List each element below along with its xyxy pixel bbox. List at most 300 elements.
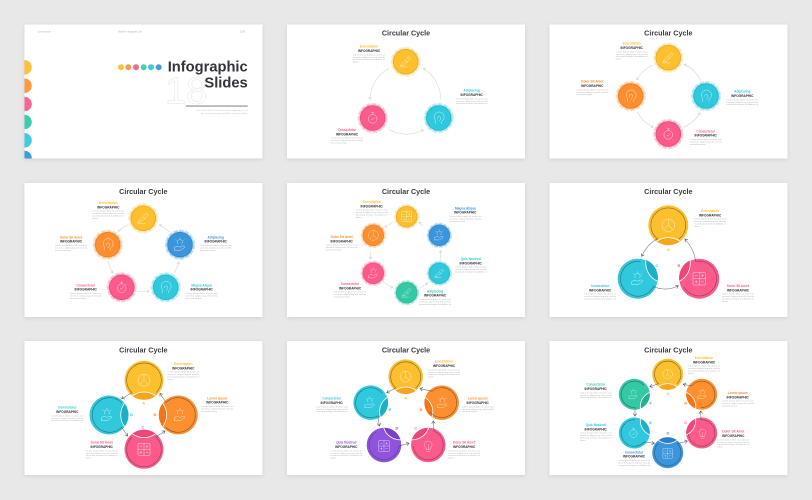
label: Adipiscing [419, 289, 452, 306]
label: Quis Nostrud: eiusmod tempor incididunt ut [455, 270, 487, 274]
label: Consectetur: Consectetur [591, 284, 610, 288]
label: Quis Nostrud [455, 257, 488, 274]
label: Consectetur: Consectetur [341, 282, 360, 286]
label: Exercitation: sectetur adipiscing elit sed do [428, 371, 461, 374]
label: Exercitation [92, 201, 125, 220]
letters: B [678, 263, 681, 268]
letters: A [667, 391, 670, 396]
label: Dolor Sit Amet: Dolor Sit Amet [581, 80, 604, 84]
label: Exercitation: labore [428, 376, 435, 379]
label: Lorem Ipsum: Lorem ipsum dolor sit amet con [462, 405, 495, 408]
arrow: yellow to green [650, 361, 681, 387]
arrow: to pink [637, 112, 653, 127]
label: Dolor Sit Amet: eiusmod tempor incididunt ut [86, 454, 118, 457]
label: Dolor Sit Amet: Lorem ipsum dolor sit amet con [326, 244, 359, 247]
label: Exercitation: labore [616, 58, 622, 61]
label: Exercitation: INFOGRAPHIC [361, 204, 384, 208]
label: Consectetur green: Lorem ipsum dolor sit amet con [580, 391, 613, 394]
label: Exercitation: labore [167, 378, 174, 381]
panel: five gears cycle [24, 183, 262, 317]
label: Dolor Sit Amet: sectetur adipiscing elit sed do [722, 295, 755, 298]
label: Consectetur: INFOGRAPHIC [321, 401, 344, 405]
label: Exercitation: INFOGRAPHIC [172, 366, 195, 370]
label: Adipiscing: sectetur adipiscing elit sed do [456, 100, 489, 103]
circle: green F [619, 379, 650, 410]
label: Dolor Sit Amet: Lorem ipsum dolor sit amet con [576, 88, 609, 91]
letters: D [667, 431, 670, 436]
arrow: left arc [370, 68, 389, 99]
label: Consectetur: eiusmod tempor incididunt ut [51, 419, 84, 422]
label: Lorem Ipsum [201, 396, 234, 413]
label: Exercitation: eiusmod tempor incididunt ut [688, 370, 720, 372]
heading: Circular Cycle [382, 29, 430, 38]
label: Lorem Ipsum: eiusmod tempor [462, 410, 478, 413]
label: Exercitation [167, 362, 200, 381]
label: Dolor Sit Amet [326, 235, 359, 252]
label: Adipiscing: Lorem ipsum dolor sit amet con [200, 244, 233, 247]
icon: pink gear [359, 104, 387, 132]
letters: B [684, 401, 687, 406]
icon: cyan gear [425, 104, 453, 132]
letters: C [656, 263, 659, 268]
label: Consectetur: eiusmod tempor incididunt ut [316, 410, 348, 413]
label: Dolor Sit Amet [448, 441, 481, 460]
panel: three gears cycle [287, 24, 525, 158]
cover title: Infographic [168, 60, 248, 76]
label: Lorem Ipsum: Lorem ipsum dolor sit amet con [722, 400, 755, 403]
header small text: Lorem ipsum [38, 31, 51, 34]
icon: pink gear [362, 262, 385, 285]
heading: Circular Cycle [644, 187, 692, 196]
label: Adipiscing [726, 90, 759, 106]
label: Dolor Sit Amet: Lorem ipsum dolor sit amet con [86, 449, 119, 452]
label: Lorem Ipsum: INFOGRAPHIC [727, 395, 750, 399]
label: Dolor Sit Amet: eiusmod tempor [55, 249, 71, 252]
arrow: yellow to cyan [122, 363, 161, 399]
label: Consectetur blue: Lorem ipsum dolor sit amet con [618, 459, 651, 462]
arrow: to cyan [420, 283, 428, 288]
label: Consectetur [334, 282, 367, 298]
label: Lorem Ipsum [462, 397, 495, 413]
label: Consectetur [584, 284, 617, 300]
label: Exercitation: labore [694, 225, 701, 228]
label: Exercitation: Exercitation [363, 200, 381, 204]
arrow: to pink [108, 261, 113, 273]
label: Dolor Sit Amet [86, 441, 119, 460]
label: Adipiscing: sectetur adipiscing elit sed do [419, 300, 452, 303]
circle: yellow A [648, 205, 688, 245]
label: Exercitation: eiusmod tempor incididunt ut [616, 55, 648, 58]
label: Exercitation: INFOGRAPHIC [621, 46, 644, 50]
arrow: to blue [440, 251, 442, 260]
label: Quis Nostrud: labore [580, 439, 586, 442]
label: Exercitation: Lorem ipsum dolor sit amet con [167, 371, 200, 374]
label: Dolor Sit Amet: labore [86, 457, 92, 460]
circle: orange B [159, 396, 198, 434]
label: Exercitation: INFOGRAPHIC [358, 49, 381, 53]
arrow: pink to orange [688, 411, 715, 446]
label: Consectetur: eiusmod tempor incididunt ut [584, 298, 616, 300]
label: Quis Nostrud: INFOGRAPHIC [335, 445, 358, 449]
label: Dolor Sit Amet: Lorem ipsum dolor sit amet con [448, 449, 481, 452]
label: Consectetur: sectetur adipiscing elit sed do [584, 295, 617, 298]
arrow: to orange [118, 225, 128, 231]
letters: E [389, 407, 392, 412]
label: Dolor Sit Amet: INFOGRAPHIC [60, 240, 83, 244]
label: Consectetur: eiusmod tempor [334, 296, 350, 298]
circle: pink C [124, 430, 164, 469]
label: Consectetur [316, 397, 349, 413]
label: Exercitation: Lorem ipsum dolor sit amet con [92, 210, 125, 213]
label: Exercitation: eiusmod tempor incididunt ut [694, 222, 726, 226]
label: Consectetur: INFOGRAPHIC [695, 134, 718, 138]
arrow: to cyan [137, 290, 149, 292]
circle: cyan E [619, 418, 650, 448]
label: Consectetur: sectetur adipiscing elit sed do [51, 417, 84, 420]
label: Lorem Ipsum: INFOGRAPHIC [206, 401, 229, 405]
label: Exercitation: labore [356, 216, 362, 219]
label: Adipiscing: sectetur adipiscing elit sed do [200, 246, 233, 249]
label: Magna Aliqua: sectetur adipiscing elit sed do [186, 294, 219, 297]
label: Exercitation: labore [688, 372, 695, 375]
label: Consectetur: Lorem ipsum dolor sit amet con [334, 291, 367, 294]
outlined number 18: 18 [165, 70, 207, 112]
label: Lorem Ipsum: Lorem ipsum dolor sit amet con [201, 405, 234, 408]
arrow: to yellow [684, 64, 701, 81]
arrow: cyan to pink [92, 398, 128, 436]
letters: B [420, 407, 423, 412]
label: Exercitation: Exercitation [435, 360, 453, 364]
icon: cyan gear [428, 262, 451, 285]
cover subtitle: Lorem ipsum dolor sit amet consectetur adipiscing elit sed [196, 109, 248, 112]
label: Lorem Ipsum: Lorem Ipsum [207, 396, 227, 400]
label: Dolor Sit Amet: labore [448, 457, 455, 460]
label: Exercitation: Exercitation [623, 42, 641, 46]
label: Exercitation: sectetur adipiscing elit sed do [92, 212, 125, 215]
label: Lorem Ipsum [722, 391, 755, 408]
label: Consectetur green: eiusmod tempor incididunt ut [580, 396, 612, 399]
label: Exercitation: Lorem ipsum dolor sit amet con [356, 209, 389, 212]
circle: cyan C [618, 259, 658, 299]
label: Consectetur: Consectetur [696, 129, 716, 133]
label: Dolor Sit Amet: Lorem ipsum dolor sit amet con [722, 293, 755, 296]
circle: purple D [367, 428, 401, 462]
label: Dolor Sit Amet [722, 284, 755, 303]
label: Consectetur: Lorem ipsum dolor sit amet con [331, 137, 364, 140]
label: Dolor Sit Amet: labore [717, 446, 724, 449]
label: Consectetur green: sectetur adipiscing elit sed do [580, 394, 613, 397]
heading: Circular Cycle [119, 187, 167, 196]
circle: orange B [686, 379, 717, 410]
label: Exercitation: eiusmod tempor incididunt ut [353, 58, 385, 61]
label: Adipiscing: Adipiscing [464, 89, 480, 93]
label: Exercitation [356, 200, 389, 219]
label: Quis Nostrud: Quis Nostrud [586, 423, 606, 427]
label: Adipiscing: Adipiscing [734, 90, 750, 94]
heading: Circular Cycle [382, 345, 430, 354]
label: Quis Nostrud: INFOGRAPHIC [585, 427, 608, 431]
label: Quis Nostrud: sectetur adipiscing elit sed do [580, 434, 613, 437]
circle: cyan E [353, 385, 388, 420]
left half circles [24, 60, 32, 158]
letters: C [142, 424, 145, 429]
label: Consectetur: eiusmod tempor [70, 297, 86, 300]
label: Magna Aliqua: sectetur adipiscing elit sed do [449, 217, 482, 220]
label: Exercitation: INFOGRAPHIC [97, 205, 120, 209]
letters [130, 401, 157, 429]
label: Magna Aliqua: Lorem ipsum dolor sit amet con [186, 292, 219, 295]
label: Magna Aliqua [186, 283, 219, 300]
label: Consectetur: INFOGRAPHIC [75, 288, 98, 292]
letters [656, 247, 681, 268]
label: Exercitation: eiusmod tempor incididunt ut [92, 214, 125, 218]
panel: six overlapping circles [550, 341, 788, 475]
icon: green gear [395, 281, 418, 304]
label: Exercitation: Lorem ipsum dolor sit amet con [694, 218, 727, 221]
label: Exercitation: labore [353, 61, 360, 64]
label: Consectetur [690, 129, 723, 146]
arrow: cyan to purple [356, 388, 382, 426]
label: Magna Aliqua [449, 206, 482, 223]
label: Adipiscing: Adipiscing [208, 235, 224, 239]
arrow: pink to yellow [684, 239, 717, 296]
label: Quis Nostrud: sectetur adipiscing elit sed do [330, 452, 363, 455]
label: Consectetur: Consectetur [338, 128, 357, 132]
icon: orange gear [617, 82, 645, 110]
label: Quis Nostrud: Lorem ipsum dolor sit amet con [330, 449, 363, 452]
panel: four gears cycle [550, 24, 788, 158]
label: Adipiscing: eiusmod tempor incididunt ut [419, 303, 451, 306]
label: Exercitation: labore [92, 217, 99, 220]
circle: yellow A [388, 359, 423, 394]
arrow: to blue [174, 262, 179, 273]
cover rule [186, 106, 248, 107]
arrow: to yellow [159, 225, 169, 232]
circle: cyan D [90, 396, 128, 434]
label: Exercitation: INFOGRAPHIC [699, 213, 722, 217]
label: Consectetur blue: Consectetur [625, 450, 644, 454]
label: Consectetur blue: INFOGRAPHIC [623, 455, 646, 459]
label: Adipiscing: eiusmod tempor [200, 249, 216, 252]
label: Dolor Sit Amet: INFOGRAPHIC [581, 84, 604, 88]
label: Exercitation: INFOGRAPHIC [433, 364, 456, 368]
label: Lorem Ipsum: eiusmod tempor [201, 410, 218, 413]
icon: orange gear [362, 224, 385, 247]
icon: orange gear [94, 231, 122, 259]
label: Consectetur green [580, 383, 613, 399]
label: Adipiscing: sectetur adipiscing elit sed do [726, 101, 759, 104]
arrow: to orange [637, 65, 653, 80]
arrow: cyan to pink [621, 261, 678, 296]
label: Exercitation: eiusmod tempor incididunt ut [428, 373, 460, 376]
letters [649, 391, 687, 436]
label: Lorem Ipsum: sectetur adipiscing elit sed do [722, 402, 755, 405]
letters: B [154, 412, 157, 417]
heading: Circular Cycle [644, 29, 692, 38]
label: Exercitation: Exercitation [701, 209, 719, 213]
label: Consectetur: Lorem ipsum dolor sit amet con [70, 292, 103, 295]
label: Dolor Sit Amet: INFOGRAPHIC [453, 445, 476, 449]
label: Exercitation: Lorem ipsum dolor sit amet con [428, 368, 461, 371]
label: Consectetur [51, 406, 84, 422]
label: Dolor Sit Amet: INFOGRAPHIC [331, 239, 354, 243]
icon: blue gear [166, 231, 194, 259]
label: Consectetur: INFOGRAPHIC [339, 286, 362, 290]
label: Consectetur: sectetur adipiscing elit sed do [334, 293, 367, 296]
panel: four overlapping circles [24, 341, 262, 475]
label: Dolor Sit Amet: INFOGRAPHIC [91, 445, 114, 449]
circle: pink C [411, 428, 446, 462]
arrow: bottom arc [388, 129, 423, 134]
circle: yellow A [652, 359, 683, 390]
label: Consectetur [331, 128, 364, 144]
arrow: orange to yellow [160, 393, 195, 432]
label: Exercitation: sectetur adipiscing elit sed do [353, 56, 386, 59]
label: Dolor Sit Amet: sectetur adipiscing elit sed do [55, 246, 88, 249]
label: Magna Aliqua: Magna Aliqua [455, 206, 476, 210]
letters: C [414, 426, 417, 431]
label: Adipiscing: eiusmod tempor incididunt ut [726, 103, 759, 106]
label: Consectetur: eiusmod tempor [331, 142, 347, 144]
header small text: 2018 [240, 32, 246, 34]
arrow: yellow to cyan [387, 362, 421, 393]
label: Consectetur: Lorem ipsum dolor sit amet con [51, 414, 84, 417]
label: Dolor Sit Amet: Dolor Sit Amet [727, 284, 750, 288]
label: Quis Nostrud: labore [330, 457, 337, 460]
label: Consectetur: sectetur adipiscing elit sed do [331, 139, 364, 142]
label: Consectetur: Consectetur [322, 397, 342, 401]
label: Dolor Sit Amet: eiusmod tempor [326, 248, 342, 252]
label: Consectetur green: Consectetur [586, 383, 606, 387]
heading: Circular Cycle [119, 345, 167, 354]
label: Dolor Sit Amet: Dolor Sit Amet [91, 441, 114, 445]
letters [389, 395, 423, 431]
label: Consectetur: Consectetur [76, 283, 96, 287]
cover subtitle [196, 109, 249, 115]
icon: yellow gear [392, 48, 420, 76]
heading: Circular Cycle [382, 187, 430, 196]
label: Dolor Sit Amet [717, 430, 750, 449]
label: Adipiscing: INFOGRAPHIC [205, 240, 228, 244]
label: Dolor Sit Amet: sectetur adipiscing elit sed do [448, 452, 481, 455]
label: Consectetur: Consectetur [58, 406, 77, 410]
arrow: cyan to blue [621, 420, 654, 446]
label: Exercitation: INFOGRAPHIC [693, 360, 716, 364]
letters: A [667, 247, 670, 252]
label: Consectetur: Lorem ipsum dolor sit amet con [316, 405, 349, 408]
label: Consectetur blue [618, 450, 651, 467]
letters: D [396, 426, 399, 431]
label: Exercitation: sectetur adipiscing elit sed do [688, 367, 721, 370]
label: Dolor Sit Amet: sectetur adipiscing elit sed do [326, 246, 359, 249]
label: Exercitation: Lorem ipsum dolor sit amet con [353, 53, 386, 56]
label: Quis Nostrud: eiusmod tempor incididunt ut [580, 436, 612, 440]
label: Quis Nostrud: sectetur adipiscing elit sed do [455, 268, 488, 271]
label: Lorem Ipsum: INFOGRAPHIC [467, 401, 490, 405]
icon: yellow gear [395, 205, 418, 228]
label: Dolor Sit Amet: eiusmod tempor [576, 93, 593, 96]
label: Magna Aliqua: Magna Aliqua [191, 283, 212, 287]
arrow: to cyan [683, 113, 700, 127]
label: Exercitation: Lorem ipsum dolor sit amet con [688, 365, 721, 368]
label: Dolor Sit Amet: eiusmod tempor incididunt ut [717, 443, 750, 446]
icon: yellow gear [654, 44, 682, 72]
arrow: to yellow [419, 222, 423, 226]
label: Exercitation [616, 42, 649, 61]
label: Consectetur: eiusmod tempor [690, 143, 706, 146]
arrow: blue to pink [655, 441, 687, 466]
label: Quis Nostrud: Quis Nostrud [336, 441, 356, 445]
label: Dolor Sit Amet: Dolor Sit Amet [722, 430, 745, 434]
label: Consectetur: INFOGRAPHIC [336, 132, 359, 136]
label: Adipiscing: Lorem ipsum dolor sit amet con [726, 98, 759, 101]
label: Consectetur: sectetur adipiscing elit sed do [316, 408, 349, 411]
label: Exercitation: sectetur adipiscing elit sed do [616, 53, 649, 56]
label: Consectetur [70, 283, 103, 300]
label: Dolor Sit Amet: INFOGRAPHIC [727, 288, 750, 292]
arrow: to green [384, 282, 393, 288]
icon: yellow gear [129, 204, 157, 232]
arrow: to orange [385, 222, 393, 227]
label: Dolor Sit Amet: labore [722, 300, 729, 303]
label: Adipiscing: Lorem ipsum dolor sit amet con [419, 298, 452, 301]
letters: D [130, 412, 133, 417]
label: Consectetur: sectetur adipiscing elit sed do [70, 294, 103, 297]
label: Exercitation: Exercitation [174, 362, 192, 366]
label: Exercitation [428, 360, 461, 379]
label: Magna Aliqua: eiusmod tempor [186, 297, 202, 300]
cover title [168, 60, 248, 92]
label: Consectetur: INFOGRAPHIC [56, 410, 79, 414]
label: Dolor Sit Amet [55, 235, 88, 252]
label: Exercitation: sectetur adipiscing elit sed do [694, 220, 727, 223]
panel: three overlapping circles [550, 183, 788, 317]
label: Magna Aliqua: eiusmod tempor [449, 220, 466, 223]
label: Consectetur: Lorem ipsum dolor sit amet con [690, 138, 723, 141]
icon: cyan gear [152, 273, 180, 301]
label: Consectetur: INFOGRAPHIC [589, 288, 612, 292]
label: Exercitation: Exercitation [99, 201, 117, 205]
label: Dolor Sit Amet: eiusmod tempor incididunt ut [448, 454, 480, 457]
label: Dolor Sit Amet: sectetur adipiscing elit sed do [86, 452, 119, 455]
label: Magna Aliqua: INFOGRAPHIC [191, 288, 214, 292]
label: Exercitation: Lorem ipsum dolor sit amet con [616, 50, 649, 53]
label: Exercitation [694, 209, 727, 228]
label: Dolor Sit Amet: Dolor Sit Amet [331, 235, 354, 239]
circle: pink C [686, 418, 717, 448]
cover title: Slides [204, 76, 248, 92]
label: Quis Nostrud: Quis Nostrud [461, 257, 481, 261]
label: Adipiscing [456, 89, 489, 105]
arrow: orange to yellow [420, 388, 457, 418]
label: Quis Nostrud: eiusmod tempor incididunt ut [330, 454, 363, 457]
panel: six gears cycle [287, 183, 525, 317]
label: Lorem Ipsum: sectetur adipiscing elit sed do [201, 407, 234, 410]
letters: E [649, 420, 652, 425]
label: Dolor Sit Amet: Lorem ipsum dolor sit amet con [55, 244, 88, 247]
letters: F [649, 401, 652, 406]
label: Quis Nostrud [580, 423, 613, 442]
arrow: yellow to cyan [642, 208, 686, 256]
label: Adipiscing: INFOGRAPHIC [461, 93, 484, 97]
label: Quis Nostrud: Lorem ipsum dolor sit amet con [455, 266, 488, 269]
label: Dolor Sit Amet: sectetur adipiscing elit sed do [576, 91, 609, 94]
label: Exercitation: eiusmod tempor incididunt ut [356, 214, 388, 216]
label: Adipiscing [200, 235, 233, 252]
label: Dolor Sit Amet: sectetur adipiscing elit sed do [717, 441, 750, 444]
label: Exercitation [353, 45, 386, 64]
arrow: purple to pink [369, 432, 409, 460]
